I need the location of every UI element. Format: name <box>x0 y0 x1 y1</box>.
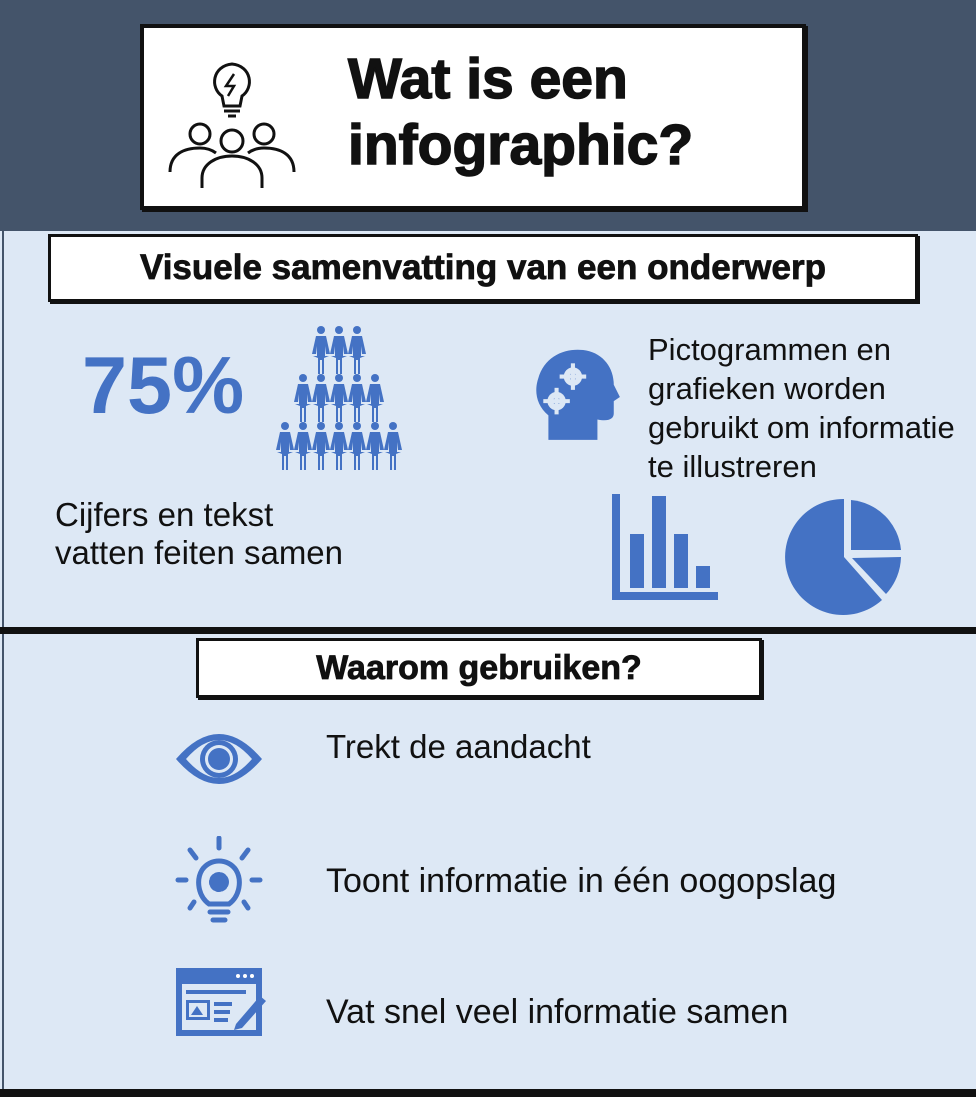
text: Pictogrammen: grafieken worden <box>648 371 886 406</box>
text: Vat snel: Vat snel veel informatie samen <box>326 993 788 1031</box>
icon: pie chart <box>785 499 901 615</box>
heading: Visuele samenvatting <box>48 234 918 302</box>
text: Pictogrammen: te illustreren <box>648 449 817 484</box>
text: Cijfers en tekst: Cijfers en tekst <box>55 496 273 533</box>
text: Pictogrammen: gebruikt om informatie <box>648 410 955 445</box>
title box <box>140 24 806 210</box>
title text: infographic? <box>348 113 693 177</box>
title text <box>347 47 693 177</box>
heading: Waarom gebruiken <box>196 638 762 698</box>
text: Toont informatie: Toont informatie in één oogopslag <box>326 862 836 900</box>
text: Cijfers en tekst: vatten feiten samen <box>55 534 343 571</box>
icon: document with pencil <box>176 968 266 1036</box>
stat: 75%: 75% <box>82 341 244 431</box>
left edge line <box>2 231 4 1091</box>
icon: eye <box>176 734 262 784</box>
title text: Wat is een <box>348 47 628 111</box>
icon: head with gears <box>536 350 620 440</box>
icon: bar chart <box>612 494 718 600</box>
text: Trekt de aandacht: Trekt de aandacht <box>326 728 591 765</box>
top band <box>0 0 976 231</box>
text: Pictogrammen: Pictogrammen en <box>648 332 891 367</box>
divider <box>0 627 976 634</box>
text: Cijfers en tekst <box>55 496 343 571</box>
icon: lightbulb gear <box>176 836 262 922</box>
text: Pictogrammen <box>648 332 955 484</box>
heading: Waarom gebruiken: Waarom gebruiken? <box>316 649 642 687</box>
bottom line <box>0 1089 976 1097</box>
icon: people with lightbulb <box>168 62 296 188</box>
heading: Visuele samenvatting: Visuele samenvatting van een onderwerp <box>140 248 826 287</box>
icon: people pyramid <box>276 326 402 470</box>
